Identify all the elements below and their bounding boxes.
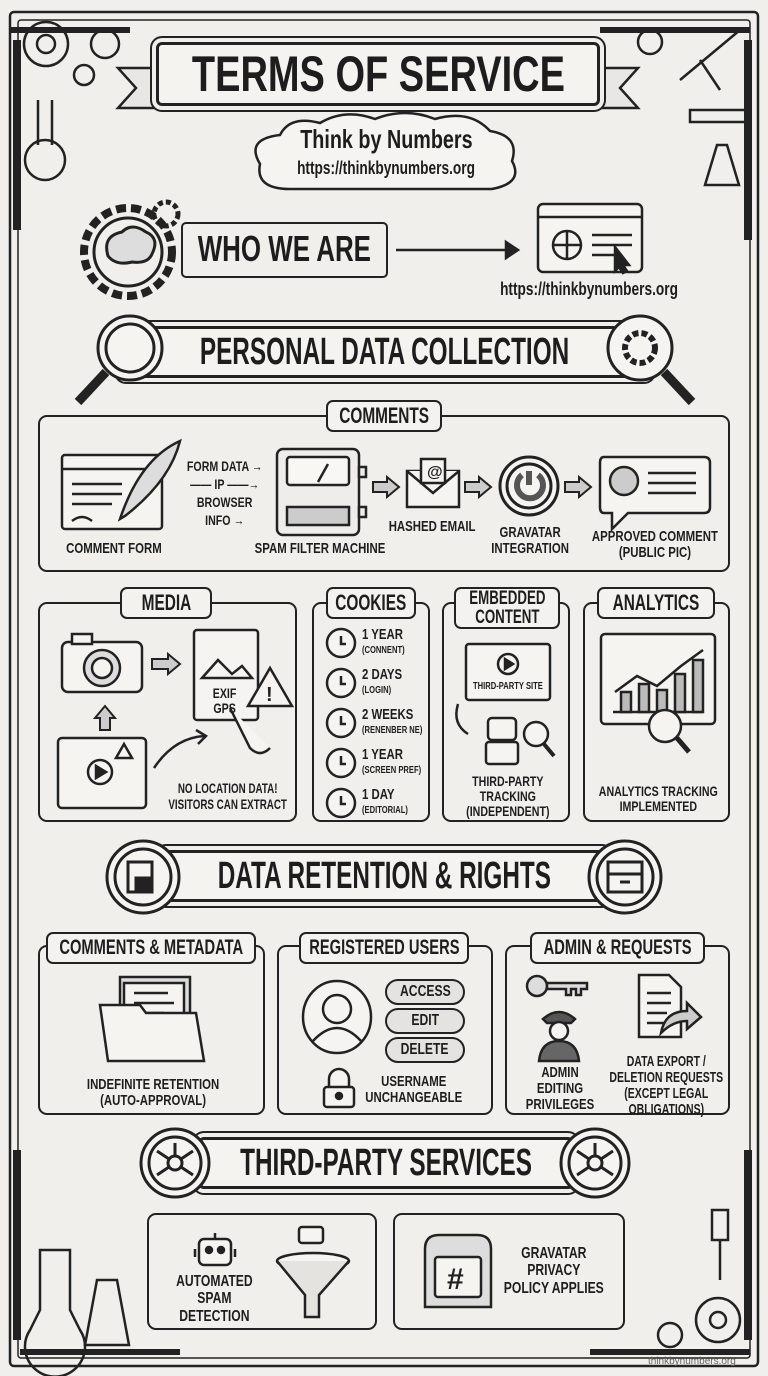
icon: folder xyxy=(98,976,206,1062)
label: analytics: ANALYTICS xyxy=(613,590,699,615)
panel: comments: INFO → xyxy=(205,512,245,528)
icon: lock xyxy=(322,1068,356,1108)
panel: comments & metadata: (AUTO-APPROVAL) xyxy=(100,1092,206,1109)
heading: third-party services xyxy=(140,1128,630,1198)
icon: third-party site xyxy=(464,642,552,702)
panel: media: EXIF xyxy=(213,685,237,701)
heading: personal data collection xyxy=(74,314,696,406)
title banner xyxy=(115,36,641,112)
panel: gravatar privacy: GRAVATAR xyxy=(521,1245,587,1262)
heading: who we are xyxy=(181,222,388,278)
heading: third-party services: THIRD-PARTY SERVICES xyxy=(240,1142,532,1184)
pill: edit xyxy=(385,1008,465,1034)
icon: data export document xyxy=(638,974,703,1038)
pill: delete: DELETE xyxy=(401,1041,449,1058)
panel: comments: COMMENT FORM xyxy=(66,540,162,557)
icon: hashed email xyxy=(406,458,460,508)
panel: analytics: ANALYTICS TRACKING xyxy=(599,783,718,799)
panel: comments: HASHED EMAIL xyxy=(389,518,475,535)
panel: automated spam detection: SPAM xyxy=(197,1290,231,1307)
icon: robot xyxy=(194,1233,236,1266)
panel: embedded content: THIRD-PARTY xyxy=(472,773,544,789)
panel: comments: (PUBLIC PIC) xyxy=(619,544,691,561)
heading: personal data collection: PERSONAL DATA COLLECTION xyxy=(200,331,570,373)
icon: comment form xyxy=(60,438,182,530)
icon: camera xyxy=(60,632,144,694)
panel: automated spam detection: DETECTION xyxy=(179,1308,249,1325)
panel: registered users: UNCHANGEABLE xyxy=(366,1089,462,1106)
label: comments: COMMENTS xyxy=(339,403,429,428)
icon: browser xyxy=(536,202,644,275)
panel: admin & requests: DATA EXPORT / xyxy=(626,1053,706,1070)
label: cookies xyxy=(326,587,416,619)
panel: gravatar privacy: POLICY APPLIES xyxy=(504,1280,604,1297)
label: comments xyxy=(326,400,442,432)
panel: registered users: USERNAME xyxy=(381,1073,447,1090)
heading: who we are: WHO WE ARE xyxy=(198,228,371,269)
panel: media: GPS xyxy=(214,700,236,716)
panel: comments xyxy=(38,415,730,572)
icon: user avatar xyxy=(302,980,372,1054)
label: embedded content: CONTENT xyxy=(475,607,539,628)
icon: gravatar xyxy=(498,456,560,516)
subtitle cloud xyxy=(254,112,516,190)
icon: key xyxy=(526,974,588,998)
label: comments & metadata xyxy=(46,932,256,964)
icon: funnel xyxy=(276,1226,350,1318)
label: registered users xyxy=(299,932,469,964)
icon: approved comment bubble xyxy=(598,456,712,531)
panel: cookies: 1 DAY xyxy=(362,786,395,803)
label: media: MEDIA xyxy=(141,590,191,615)
panel: cookies: (CONNENT) xyxy=(362,645,405,656)
panel: admin & requests: ADMIN xyxy=(541,1064,579,1081)
heading: data retention & rights xyxy=(106,840,662,914)
label: embedded content: EMBEDDED xyxy=(469,588,545,609)
title banner: TERMS OF SERVICE xyxy=(191,46,565,102)
subtitle cloud: Think by Numbers xyxy=(300,124,472,154)
panel: automated spam detection: AUTOMATED xyxy=(176,1273,252,1290)
panel: embedded content: (INDEPENDENT) xyxy=(466,803,550,819)
panel: comments: GRAVATAR xyxy=(499,524,561,541)
icon: hashed email: @ xyxy=(427,464,443,481)
icon: gravatar safe xyxy=(424,1234,492,1308)
panel: admin & requests: EDITING xyxy=(537,1080,583,1097)
panel: media: NO LOCATION DATA! xyxy=(178,780,278,796)
panel: registered users xyxy=(277,945,493,1115)
panel: cookies: (LOGIN) xyxy=(362,685,391,696)
label: embedded content xyxy=(454,587,560,629)
icon: chart with magnifier xyxy=(600,632,716,754)
panel: cookies: 1 YEAR xyxy=(362,746,403,763)
panel: gravatar privacy xyxy=(393,1213,625,1330)
label: admin & requests xyxy=(530,932,705,964)
icon: robot xyxy=(455,704,556,766)
panel: comments: APPROVED COMMENT xyxy=(592,528,718,545)
pill: access: ACCESS xyxy=(400,983,450,1000)
panel: cookies xyxy=(312,602,430,822)
label: admin & requests: ADMIN & REQUESTS xyxy=(544,936,691,959)
icon: admin officer xyxy=(538,1010,580,1062)
label: comments & metadata: COMMENTS & METADATA xyxy=(59,936,243,959)
panel: admin & requests: DELETION REQUESTS xyxy=(609,1069,723,1086)
panel: embedded content xyxy=(442,602,570,822)
label: cookies: COOKIES xyxy=(335,590,407,615)
panel: cookies: (RENENBER NE) xyxy=(362,725,422,736)
panel: cookies: 1 YEAR xyxy=(362,626,403,643)
pill: access xyxy=(385,979,465,1005)
panel: comments: INTEGRATION xyxy=(491,540,569,557)
panel: embedded content: THIRD-PARTY SITE xyxy=(473,681,543,692)
panel: analytics: IMPLEMENTED xyxy=(620,798,697,814)
panel: comments: —— IP ——→ xyxy=(191,476,259,492)
arrow xyxy=(396,240,520,260)
panel: cookies: (EDITORIAL) xyxy=(362,805,408,816)
panel: cookies: 2 DAYS xyxy=(362,666,402,683)
icon: photo exif: ! xyxy=(266,684,273,706)
pill: edit: EDIT xyxy=(411,1012,439,1029)
panel: gravatar privacy: PRIVACY xyxy=(527,1262,581,1279)
panel: cookies: 2 WEEKS xyxy=(362,706,413,723)
panel: cookies: (SCREEN PREF) xyxy=(362,765,421,776)
panel: automated spam detection xyxy=(147,1213,377,1330)
label: registered users: REGISTERED USERS xyxy=(309,936,459,959)
panel: admin & requests: OBLIGATIONS) xyxy=(628,1101,704,1118)
heading: data retention & rights: DATA RETENTION & RIGHTS xyxy=(217,855,551,897)
panel: comments & metadata: INDEFINITE RETENTION xyxy=(87,1076,220,1093)
label: media xyxy=(120,587,212,619)
watermark: thinkbynumbers.org xyxy=(648,1356,736,1367)
panel: admin & requests: (EXCEPT LEGAL xyxy=(624,1085,708,1102)
panel: comments: SPAM FILTER MACHINE xyxy=(255,540,385,557)
panel: admin & requests xyxy=(505,945,730,1115)
panel: media xyxy=(38,602,297,822)
icon: spam filter machine xyxy=(276,448,368,536)
panel: admin & requests: PRIVILEGES xyxy=(526,1096,594,1113)
panel: media: VISITORS CAN EXTRACT xyxy=(169,796,287,812)
icon: brain gear xyxy=(80,200,180,300)
panel: embedded content: TRACKING xyxy=(480,788,536,804)
icon: photo exif xyxy=(192,628,294,754)
panel: comments: FORM DATA → xyxy=(187,458,263,474)
icon: gravatar safe: # xyxy=(447,1263,464,1296)
url: https://thinkbynumbers.org xyxy=(500,279,678,299)
subtitle cloud: https://thinkbynumbers.org xyxy=(297,158,475,178)
panel: comments: BROWSER xyxy=(197,494,253,510)
pill: delete xyxy=(385,1037,465,1063)
icon: video player xyxy=(56,736,148,810)
label: analytics xyxy=(597,587,715,619)
panel: analytics xyxy=(583,602,730,822)
panel: comments & metadata xyxy=(38,945,265,1115)
